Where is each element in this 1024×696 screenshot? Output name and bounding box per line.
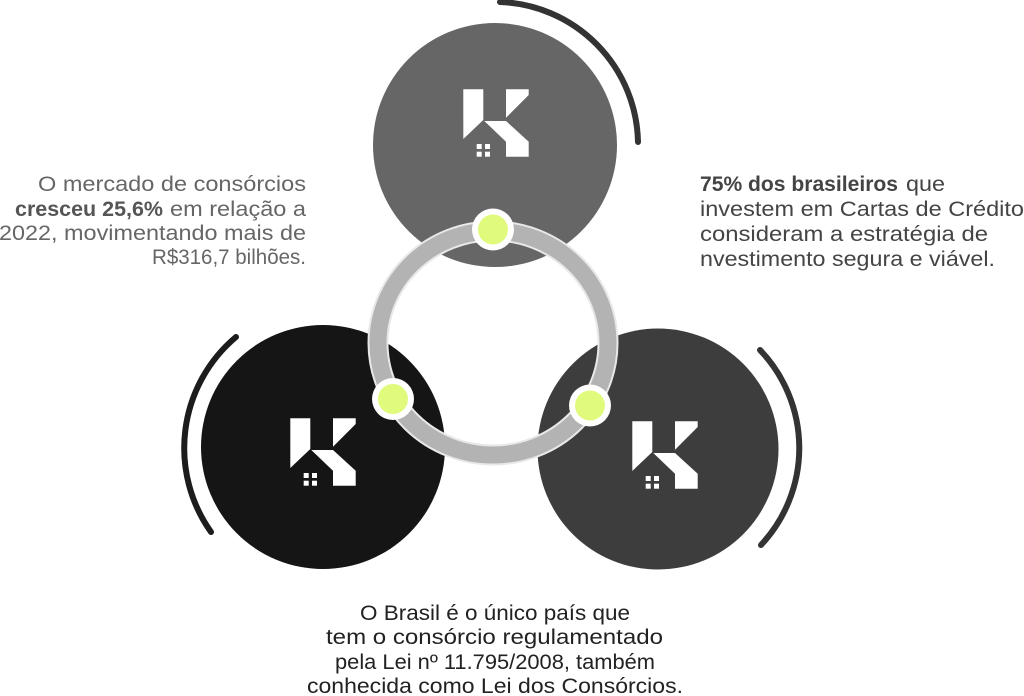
text block: market growth: 2022, movimentando mais de [0, 222, 306, 245]
icon: top K house logo [463, 89, 529, 157]
panel: bottom right circle [538, 328, 799, 570]
icon: bottom left K house logo [290, 418, 356, 486]
text block: investors [700, 173, 1024, 271]
bottom right circle disc [538, 328, 778, 570]
node: bottom left [372, 378, 414, 420]
central ring with nodes [372, 208, 611, 455]
text block: investors: consideram a estratégia de [700, 223, 988, 246]
text block: investors: 75% dos brasileiros [700, 173, 898, 196]
text block: investors: que [906, 173, 945, 196]
text block: investors: nvestimento segura e viável. [700, 248, 995, 271]
node: top [472, 208, 514, 250]
top circle arc [500, 2, 638, 142]
top circle disc [373, 23, 617, 267]
text block: market growth [0, 173, 306, 269]
text block: market growth: O mercado de consórcios [38, 173, 306, 196]
panel: top circle [373, 2, 638, 267]
icon: bottom right K house logo [632, 421, 698, 489]
node: bottom right [569, 384, 611, 426]
text block: market growth: em relação a [170, 198, 306, 221]
text block: regulation: O Brasil é o único país que [360, 602, 630, 625]
panel: bottom left circle [184, 325, 445, 569]
bottom left circle arc [184, 337, 236, 532]
text block: market growth: cresceu 25,6% [15, 198, 163, 221]
bottom left circle disc [201, 325, 445, 569]
text block: market growth: R$316,7 bilhões. [152, 246, 306, 269]
text block: regulation: pela Lei nº 11.795/2008, também [335, 651, 655, 674]
bottom right circle arc [760, 350, 799, 545]
text block: regulation [307, 602, 683, 696]
text block: investors: investem em Cartas de Crédito [700, 198, 1024, 221]
text block: regulation: tem o consórcio regulamentado [326, 626, 663, 649]
